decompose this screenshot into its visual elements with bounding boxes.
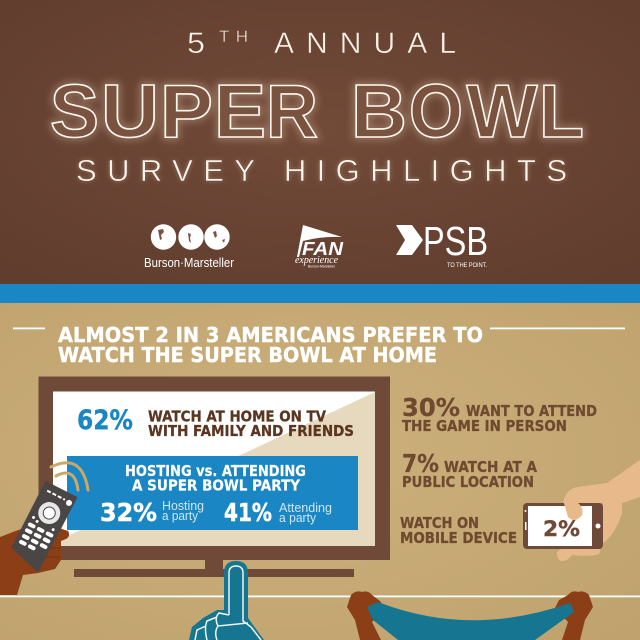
title: 5th annual: 5: [187, 27, 205, 60]
title: Super Bowl outlined letters: W: [466, 69, 538, 153]
logo: Fan Experience: [295, 225, 344, 268]
title: Super Bowl outlined letters: B: [351, 69, 407, 153]
stat: 62% watch at home: 62%: [77, 405, 133, 436]
icon: remote control: [7, 481, 78, 573]
stat: 62% watch at home: WITH FAMILY AND FRIENDS: [148, 422, 354, 440]
title: Super Bowl outlined letters: L: [539, 69, 584, 153]
icon: signal arcs: [51, 463, 88, 490]
title: Super Bowl outlined letters: O: [409, 69, 463, 153]
title: Super Bowl outlined letters: U: [101, 69, 159, 153]
text: 30% want to attend: WANT TO ATTEND: [466, 402, 597, 420]
illustration: hand holding phone: [523, 460, 640, 561]
text: watch on mobile device: [400, 514, 517, 547]
stat: 32% hosting: a party: [162, 508, 198, 523]
logo: PSB: [396, 218, 488, 269]
stat: 41% attending: Attending: [279, 500, 332, 515]
heading: WATCH THE SUPER BOWL AT HOME: [58, 343, 437, 367]
panel: hosting vs attending: HOSTING vs. ATTENDING: [125, 462, 306, 480]
logo: Fan Experience: experience: [295, 255, 339, 266]
text: watch on mobile device: WATCH ON: [400, 514, 479, 532]
heading rule left: [13, 328, 45, 329]
heading: ALMOST 2 IN 3 AMERICANS PREFER TO: [58, 323, 483, 347]
logo: Fan Experience: FAN: [302, 239, 344, 259]
title: 5th annual: [187, 27, 456, 60]
title: 5th annual: TH: [219, 27, 248, 46]
stat: 41% attending: 41%: [224, 498, 272, 527]
blue divider band: [0, 284, 640, 303]
logo: Burson-Marsteller: [144, 224, 235, 270]
title: Super Bowl outlined letters: S: [50, 69, 99, 153]
panel: TV set: [38, 376, 390, 577]
title: Super Bowl outlined letters: E: [214, 69, 266, 153]
title: Super Bowl outlined letters: P: [160, 69, 213, 153]
floor line: [0, 596, 640, 597]
title: 5th annual: ANNUAL: [274, 27, 456, 60]
title: survey highlights: SURVEY HIGHLIGHTS: [76, 153, 567, 188]
logo: Fan Experience: Burson-Marsteller: [308, 264, 336, 268]
logo: PSB: TO THE POINT.: [447, 263, 487, 269]
title: Super Bowl outlined letters: P: [160, 69, 213, 153]
text: 7% public location: [402, 449, 537, 491]
title: Super Bowl outlined letters: B: [351, 69, 407, 153]
stat: 41% attending: [224, 498, 332, 527]
title: Super Bowl outlined letters: W: [466, 69, 538, 153]
text: 7% public location: PUBLIC LOCATION: [402, 473, 534, 491]
illustration: hands holding scarf: [347, 591, 593, 640]
title: Super Bowl outlined letters: R: [266, 69, 318, 153]
heading: [58, 323, 483, 367]
panel: hosting vs attending: A SUPER BOWL PARTY: [132, 476, 301, 494]
illustration: hand with remote: [0, 463, 88, 595]
text: 7% public location: 7%: [402, 449, 439, 478]
title: Super Bowl outlined letters: O: [409, 69, 463, 153]
logo: Burson-Marsteller: Burson·Marsteller: [144, 255, 235, 270]
title: Super Bowl outlined letters: R: [266, 69, 318, 153]
panel: lower tan background: [0, 303, 640, 640]
icon: smartphone: 2%: [543, 517, 580, 541]
title: Super Bowl outlined letters: [50, 69, 584, 153]
title: survey highlights: SURVEY HIGHLIGHTS: [76, 153, 567, 188]
stat: 62% watch at home: WATCH AT HOME ON TV: [148, 408, 326, 426]
stat: 32% hosting: Hosting: [162, 498, 204, 513]
text: 30% want to attend: 30%: [402, 393, 460, 422]
text: 7% public location: WATCH AT A: [444, 458, 537, 476]
heading rule right: [490, 328, 625, 329]
title: Super Bowl outlined letters: U: [101, 69, 159, 153]
title: Super Bowl outlined letters: S: [50, 69, 99, 153]
panel: hosting vs attending: [67, 456, 358, 530]
logo: PSB: PSB: [423, 218, 488, 264]
text: 30% want to attend: [402, 393, 597, 435]
illustration: foam finger: [189, 561, 264, 640]
title: Super Bowl outlined letters: E: [214, 69, 266, 153]
title: Super Bowl outlined letters: L: [539, 69, 584, 153]
panel: header background: [0, 0, 640, 284]
stat: 62% watch at home: [77, 405, 354, 440]
text: 30% want to attend: THE GAME IN PERSON: [402, 417, 567, 435]
text: watch on mobile device: MOBILE DEVICE: [400, 529, 517, 547]
stat: 32% hosting: 32%: [100, 498, 157, 527]
stat: 41% attending: a party: [279, 510, 316, 525]
stat: 32% hosting: [100, 498, 204, 527]
icon: teal scarf: [367, 602, 574, 640]
